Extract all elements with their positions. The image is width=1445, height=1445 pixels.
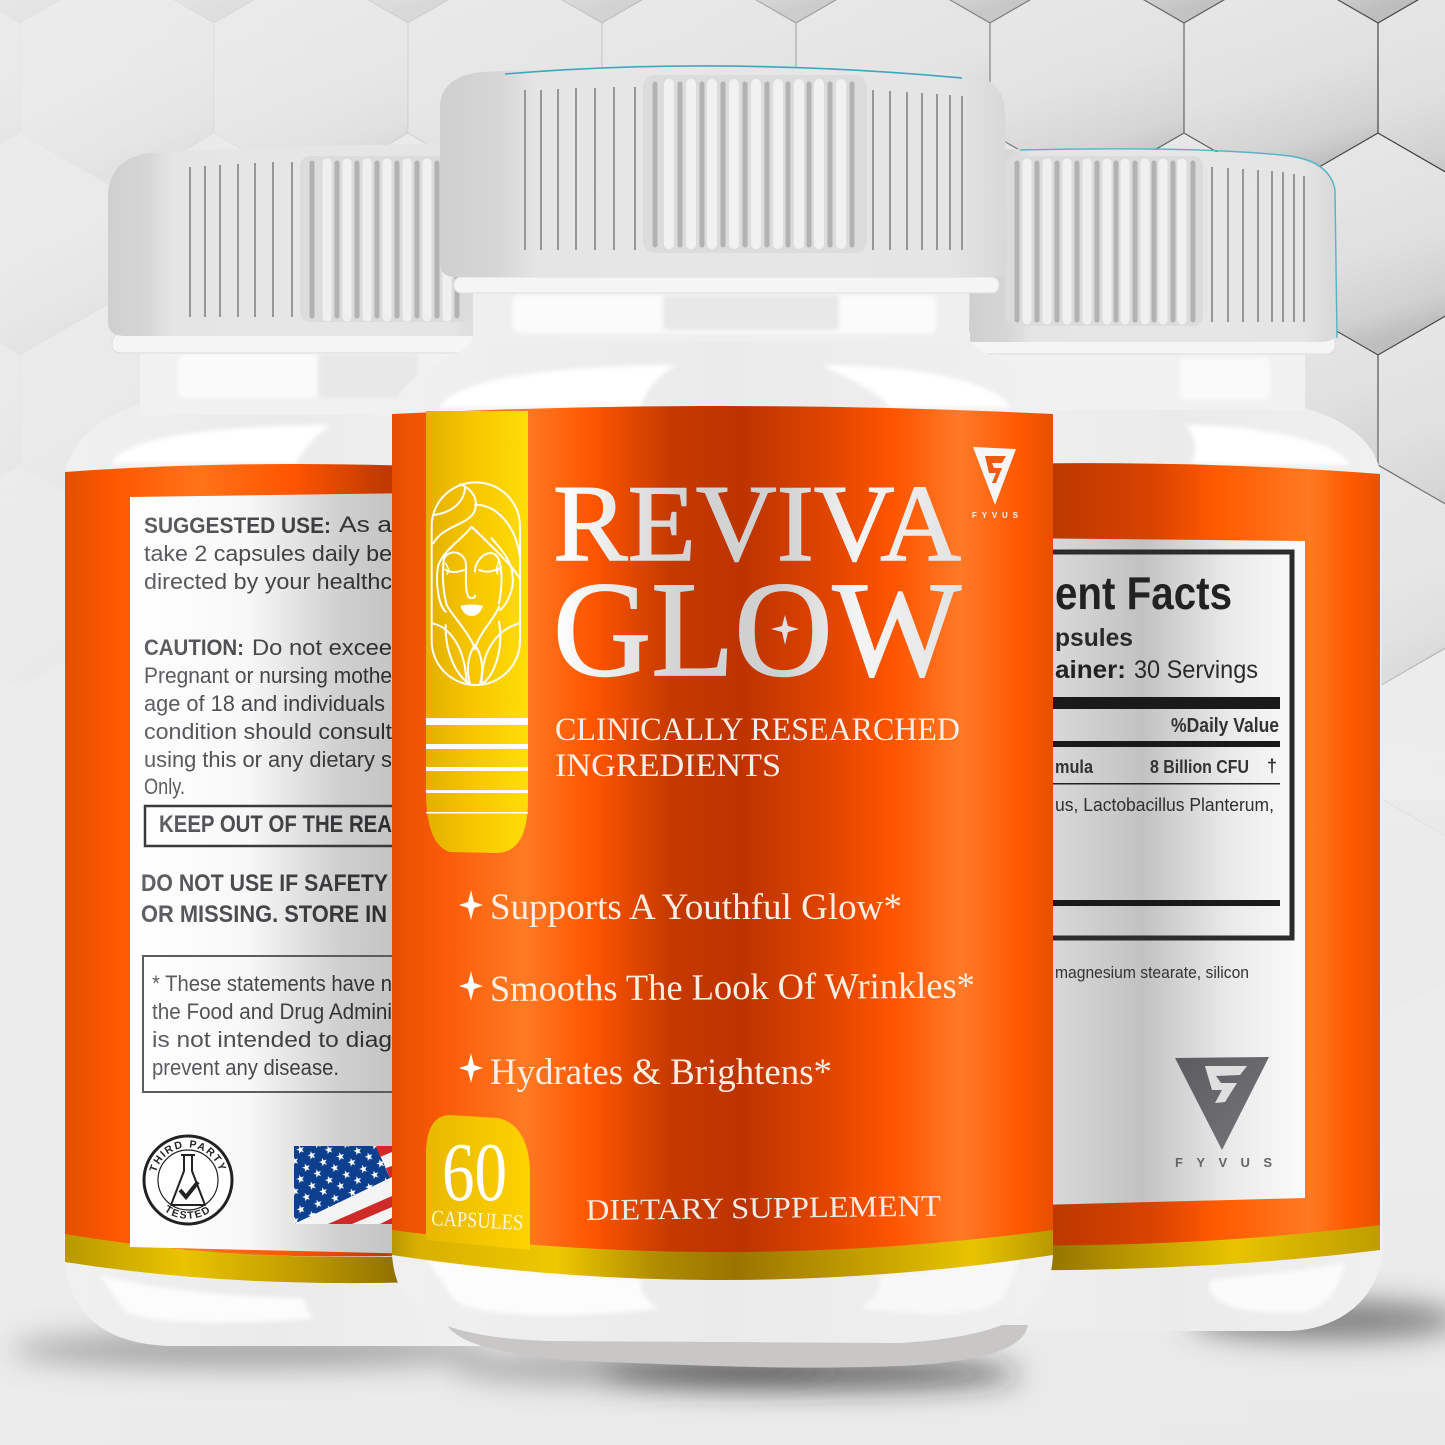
left bottle cap: [108, 144, 490, 336]
suggested use text: SUGGESTED USE:: [144, 513, 331, 538]
right bottle shoulder highlight: [1185, 425, 1350, 465]
suggested use text: take 2 capsules daily be: [144, 541, 392, 566]
left bottle base highlight: [100, 1275, 316, 1323]
supplement facts table: †: [1267, 756, 1277, 776]
center bottle underside shadow: [447, 1325, 1028, 1368]
right bottle orange label: [1000, 463, 1380, 1247]
center bottle base highlights: [425, 1258, 1020, 1315]
icon: Fyvus logo: [1175, 1057, 1272, 1170]
third party tested badge: TESTED: [166, 1204, 209, 1219]
FDA disclaimer box: prevent any disease.: [152, 1055, 339, 1080]
supplement facts table: ainer:: [1055, 656, 1126, 684]
keep out of reach box: KEEP OUT OF THE REA: [159, 811, 392, 838]
icon: Fyvus logo on front: [972, 447, 1019, 520]
dietary supplement line: DIETARY SUPPLEMENT: [586, 1190, 941, 1227]
suggested use text: As a: [339, 512, 393, 537]
center bottle: front label: [392, 66, 1053, 1368]
icon: Fyvus logo on front: FYVUS: [972, 511, 1019, 520]
title: Reviva Glow: [553, 463, 962, 705]
icon: woman's face line art: [432, 482, 520, 685]
supplement facts table: ent Facts: [1055, 567, 1232, 619]
left bottle neck and collar: [112, 334, 480, 415]
tagline: clinically researched ingredients: INGREDIENTS: [555, 748, 781, 784]
supplement facts table: [1000, 552, 1292, 938]
FDA disclaimer box: the Food and Drug Admini: [152, 999, 392, 1024]
benefit 3: Hydrates & Brightens*: [490, 1052, 832, 1093]
right white facts panel: [1000, 538, 1305, 1206]
supplement facts table: 30 Servings: [1134, 656, 1258, 684]
tagline: clinically researched ingredients: [555, 712, 960, 784]
left bottle body: [64, 405, 480, 1346]
safety warning text: [141, 870, 388, 928]
center bottle shoulder highlights: [440, 365, 1010, 408]
safety warning text: OR MISSING. STORE IN: [141, 901, 387, 928]
center bottle gold band: [392, 1230, 1053, 1280]
yellow vertical tab: [426, 411, 528, 853]
caution text: using this or any dietary s: [144, 747, 392, 772]
benefit 2: Smooths The Look Of Wrinkles*: [490, 966, 975, 1010]
60 capsules badge: [426, 1115, 530, 1250]
right bottle body: [960, 405, 1383, 1331]
right bottle gold band: [1000, 1225, 1380, 1270]
supplement facts table: mula: [1055, 757, 1094, 777]
supplement facts table: psules: [1055, 624, 1133, 652]
caution text: age of 18 and individuals: [144, 691, 385, 716]
right bottle neck: [960, 332, 1335, 410]
caution text: [144, 635, 392, 799]
other ingredients text: magnesium stearate, silicon: [1055, 963, 1249, 982]
right bottle base highlight: [1209, 1262, 1345, 1313]
FDA disclaimer box: * These statements have n: [152, 971, 392, 996]
suggested use text: [144, 512, 393, 594]
center bottle orange label: [392, 406, 1053, 1253]
third party tested badge: [142, 1134, 234, 1226]
tagline: clinically researched ingredients: CLINICALLY RESEARCHED: [555, 712, 960, 748]
center bottle body: [392, 338, 1053, 1343]
safety warning text: DO NOT USE IF SAFETY: [141, 870, 388, 897]
right bottle cap: [970, 149, 1337, 342]
icon: sparkle inside the O: [771, 615, 799, 645]
60 capsules badge: CAPSULES: [431, 1205, 524, 1235]
suggested use text: directed by your healthc: [144, 569, 392, 594]
caution text: Pregnant or nursing mothe: [144, 663, 392, 688]
caution text: Only.: [144, 774, 185, 799]
60 capsules badge: 60: [442, 1126, 507, 1219]
supplement facts table: us, Lactobacillus Planterum,: [1055, 795, 1274, 815]
third party tested badge: THIRD PARTY: [149, 1140, 226, 1170]
FDA disclaimer box: is not intended to diag: [152, 1027, 392, 1052]
left bottle: back label: [65, 144, 530, 1346]
supplement facts table: 8 Billion CFU: [1150, 757, 1249, 777]
FDA disclaimer box: [143, 956, 418, 1092]
left bottle shoulder highlight: [112, 425, 330, 464]
white stripes on yellow tab: [426, 718, 528, 814]
caution text: Do not excee: [252, 635, 392, 660]
floor shadows under bottles: [10, 1300, 1445, 1389]
center bottle cap: [440, 66, 1007, 277]
title: Reviva Glow: REVIVA: [553, 463, 961, 584]
benefit 1: Supports A Youthful Glow*: [490, 887, 902, 928]
keep out of reach box: [145, 806, 415, 846]
american flag: [294, 1146, 392, 1224]
center bottle neck: [473, 292, 969, 342]
left bottle gold band: [65, 1234, 420, 1283]
icon: Fyvus logo: FYVUS: [1175, 1155, 1272, 1170]
caution text: CAUTION:: [144, 635, 244, 660]
right bottle: supplement facts: [960, 149, 1383, 1331]
background: hexagon wall: [62, 0, 1445, 686]
left bottle orange label: [65, 464, 420, 1256]
benefit list: [459, 887, 975, 1093]
title: Reviva Glow: GLOW: [553, 555, 962, 705]
center bottle collar: [454, 277, 999, 293]
supplement facts table: %Daily Value: [1171, 715, 1279, 737]
caution text: condition should consult: [144, 719, 392, 744]
left white information panel: [130, 493, 420, 1254]
